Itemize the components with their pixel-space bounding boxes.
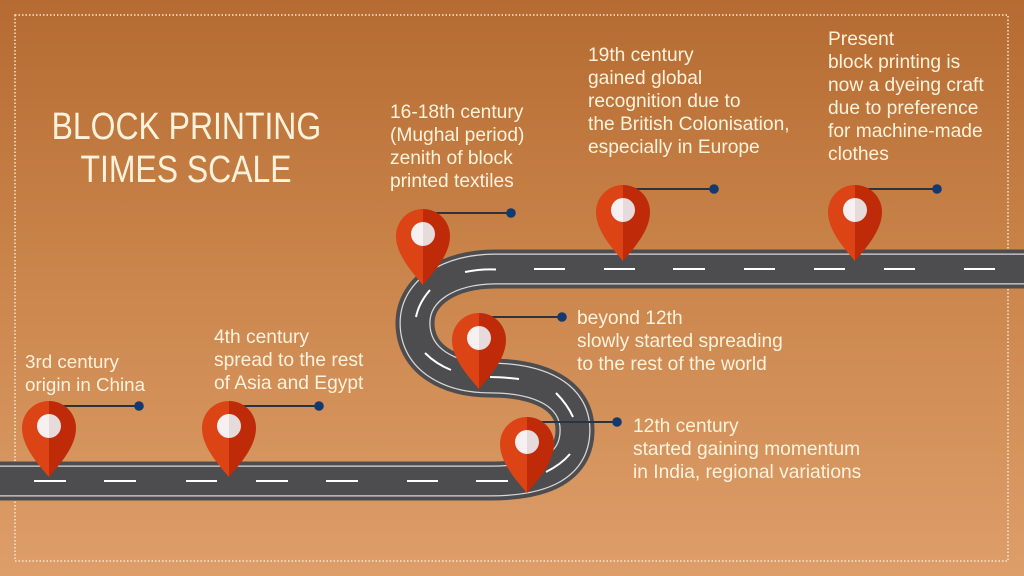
text: 12th century (633, 416, 861, 483)
text: 12th century: started gaining momentum (633, 439, 860, 460)
text: present: block printing is (828, 52, 960, 73)
text: beyond 12th: beyond 12th (577, 308, 683, 329)
text: present: for machine-made (828, 121, 983, 142)
text: 19th century: gained global (588, 68, 702, 89)
text: 4th century: of Asia and Egypt (214, 373, 363, 394)
timeline pin: 12th century (500, 417, 622, 493)
text: present (828, 29, 984, 165)
text: beyond 12th: slowly started spreading (577, 331, 783, 352)
text: beyond 12th: to the rest of the world (577, 354, 767, 375)
text: 16-18th century: zenith of block (390, 148, 513, 169)
title: TIMES SCALE (80, 149, 292, 191)
text: 16-18th century (390, 102, 524, 192)
text: 4th century (214, 327, 364, 394)
text: 3rd century (25, 351, 146, 395)
timeline pin: 3rd century (22, 401, 144, 477)
text: 19th century (588, 45, 790, 158)
text: 19th century: recognition due to (588, 91, 741, 112)
text: 12th century: in India, regional variations (633, 462, 861, 483)
text: 3rd century: 3rd century (25, 351, 119, 372)
text: present: due to preference (828, 98, 978, 119)
timeline pin: 19th century (596, 184, 719, 261)
text: 19th century: 19th century (588, 45, 694, 66)
text: 16-18th century: printed textiles (390, 171, 514, 192)
text: 4th century: spread to the rest (214, 350, 363, 371)
timeline pin: 16-18th century (396, 208, 516, 285)
title: BLOCK PRINTING (52, 106, 321, 148)
text: present: Present (828, 29, 894, 50)
text: 19th century: the British Colonisation, (588, 114, 790, 135)
text: beyond 12th (577, 308, 783, 375)
text: 19th century: especially in Europe (588, 137, 760, 158)
text: 3rd century: origin in China (25, 374, 145, 395)
text: 12th century: 12th century (633, 416, 739, 437)
timeline pin: beyond 12th (452, 312, 567, 389)
text: present: clothes (828, 144, 889, 165)
road (0, 269, 1024, 481)
text: present: now a dyeing craft (828, 75, 984, 96)
text: 16-18th century: 16-18th century (390, 102, 523, 123)
text: 16-18th century: (Mughal period) (390, 125, 524, 146)
title (52, 106, 321, 191)
timeline pin: 4th century (202, 401, 324, 477)
timeline pin: present (828, 184, 942, 261)
text: 4th century: 4th century (214, 327, 309, 348)
